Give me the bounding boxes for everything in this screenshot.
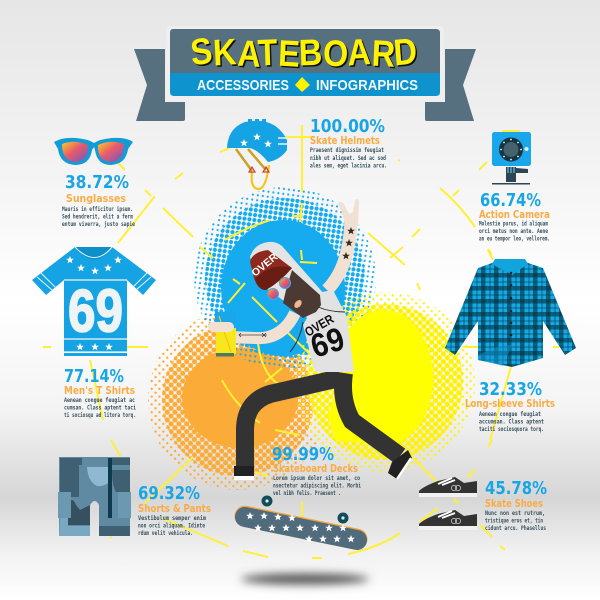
ribbon tail left	[134, 49, 185, 121]
icon: plaid shirt	[445, 259, 576, 367]
text block: camera: 66.74%	[480, 190, 541, 211]
halftone blob: orange	[148, 310, 328, 490]
text block: t-shirts	[64, 366, 136, 419]
text block: camera: Molestie purus, id aliquam	[479, 220, 548, 228]
text block: camera: orci metus non ante. Aene	[479, 227, 548, 235]
diamond icon	[295, 77, 310, 92]
text block: decks	[272, 444, 361, 497]
text block: sunglasses: entum viverra, justo sapie	[62, 220, 135, 228]
hood	[250, 242, 325, 320]
icon: shorts	[58, 457, 131, 536]
text block: shoes: 45.78%	[485, 478, 547, 499]
skater sunglasses	[268, 278, 290, 300]
text block: long-sleeve shirts: Long-sleeve Shirts	[465, 398, 555, 410]
text block: shoes	[485, 478, 547, 532]
text block: sunglasses: 38.72%	[65, 172, 129, 193]
text block: decks: Lorem ipsum dolor sit amet, co	[273, 474, 360, 482]
text block: decks: nsectetur adipiscing elit. Morbi	[273, 482, 361, 490]
tattoo stars	[342, 227, 355, 259]
icon: sunglasses	[54, 138, 133, 165]
text block: camera: Action Camera	[479, 209, 550, 221]
text block: shorts	[138, 483, 211, 537]
text block: decks: Skateboard Decks	[273, 463, 358, 475]
text block: shoes: Nunc non est rutrum,	[485, 510, 545, 517]
halftone blob: yellow	[295, 292, 475, 472]
text block: sunglasses	[62, 172, 135, 228]
text block: shoes: Skate Shoes	[485, 498, 543, 510]
title: skateboard: SKATEBOARD	[188, 30, 419, 75]
title: skateboard: SKATEBOARD	[189, 32, 420, 76]
text block: long-sleeve shirts: accumsan. Class aptent	[479, 418, 544, 426]
cap	[250, 250, 292, 290]
text block: camera: an eu tempor leo, vellorem.	[479, 236, 550, 242]
yellow radial lines	[43, 125, 559, 558]
text block: shorts: 69.32%	[138, 483, 200, 504]
left shoe	[234, 466, 254, 480]
subtitle: accessories: ACCESSORIES	[197, 77, 289, 94]
pants	[245, 373, 400, 470]
text block: helmets	[310, 116, 387, 170]
text block: helmets: ales sem, eget lacinia arcu.	[310, 162, 387, 170]
text block: t-shirts: Men's T Shirts	[64, 385, 135, 397]
text block: decks: vel nibh felis. Praesent .	[273, 489, 341, 497]
text block: t-shirts: Aenean congue feugiat ac	[64, 396, 135, 404]
hair and beard	[283, 270, 321, 318]
icon: skate helmet	[227, 119, 288, 189]
text block: helmets: Skate Helmets	[310, 135, 380, 147]
cup with drink	[208, 312, 236, 356]
text block: t-shirts: cumsan. Class aptent taci	[64, 404, 136, 412]
text block: decks: 99.99%	[272, 444, 334, 465]
mouth	[293, 299, 303, 309]
figure: skater	[208, 199, 412, 480]
text block: long-sleeve shirts: 32.33%	[479, 379, 542, 400]
icon: skate shoes	[419, 477, 477, 530]
text block: sunglasses: Sunglasses	[66, 193, 126, 205]
arm tattoo	[239, 333, 267, 337]
cap logo: OVER	[249, 251, 281, 279]
text block: camera	[479, 190, 550, 242]
text block: helmets: Praesent dignissim feugiat	[310, 146, 384, 154]
text block: shoes: cidunt arcu. Phasellus	[485, 524, 546, 532]
earphone cord	[290, 307, 345, 352]
title banner	[166, 26, 444, 100]
icon: action camera	[492, 132, 531, 184]
text block: t-shirts: ti sociosqu ad litora torq.	[64, 411, 136, 419]
text block: shorts: non orci aliquam. Idinte	[138, 522, 205, 530]
shirt print: 69	[306, 320, 349, 365]
raised arm	[327, 222, 351, 290]
shirt torso	[303, 290, 354, 372]
hand	[338, 199, 359, 226]
ground shadow	[241, 574, 369, 584]
text block: long-sleeve shirts	[465, 379, 555, 433]
icon: t-shirt	[32, 247, 156, 356]
subtitle: infographics: INFOGRAPHICS	[316, 77, 418, 94]
icon: t-shirt: 69	[68, 278, 123, 344]
text block: long-sleeve shirts: Aenean congue feugiat	[479, 410, 541, 418]
right shoe	[388, 450, 412, 479]
halftone blob: blue	[194, 187, 376, 369]
text block: shorts: Shorts & Pants	[138, 503, 211, 515]
icon: skateboard deck	[245, 496, 357, 542]
text block: shorts: rdum velit vehicula.	[138, 529, 193, 537]
shirt print: OVER	[302, 311, 337, 340]
text block: shoes: tristique eros et, tin	[485, 516, 543, 524]
ribbon tail right	[425, 49, 476, 121]
text block: sunglasses: Sed hendrerit, elit a ferm	[62, 212, 133, 220]
left arm	[228, 313, 295, 338]
text block: helmets: nibh ut aliquet. Sed ac sod	[310, 154, 386, 162]
text block: helmets: 100.00%	[310, 116, 385, 137]
text block: shorts: Vestibulum semper enim	[138, 514, 206, 522]
text block: long-sleeve shirts: taciti sociosquora torq.	[479, 425, 544, 433]
text block: sunglasses: Mauris in efficitur ipsum.	[62, 205, 133, 213]
text block: t-shirts: 77.14%	[64, 366, 124, 387]
